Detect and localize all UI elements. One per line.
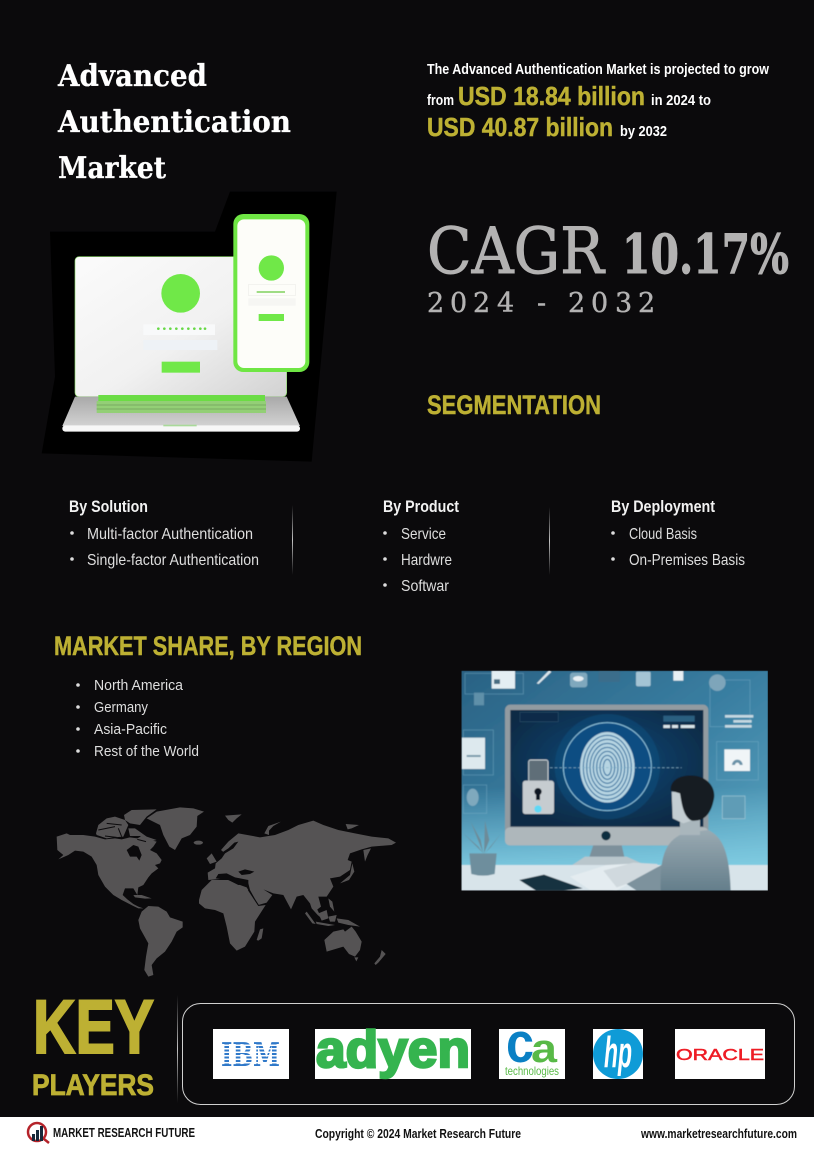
CAGR figure: 2024 - 2032 bbox=[427, 288, 655, 319]
region list: North America bbox=[94, 677, 184, 694]
tablet bbox=[519, 875, 583, 891]
market projection text: in 2024 to bbox=[651, 92, 711, 109]
logo: IBM bbox=[213, 1029, 289, 1079]
segment: by product: Hardwre bbox=[401, 552, 452, 569]
segment: by product: Softwar bbox=[401, 578, 450, 595]
logo: market research future: MARKET RESEARCH FUTURE bbox=[53, 1125, 195, 1140]
logo: Oracle bbox=[675, 1029, 765, 1079]
market share heading: MARKET SHARE, BY REGION bbox=[54, 631, 362, 661]
key players heading: PLAYERS bbox=[32, 1069, 154, 1102]
segment: by product: Service bbox=[401, 526, 446, 543]
segment: by solution bbox=[69, 497, 259, 569]
footer bbox=[0, 1117, 814, 1150]
title bbox=[57, 59, 291, 186]
CAGR figure: CAGR bbox=[427, 215, 606, 289]
market projection text: from bbox=[427, 92, 454, 109]
key players panel bbox=[182, 1004, 794, 1104]
logo: HP bbox=[593, 1028, 643, 1079]
plant bbox=[467, 822, 498, 876]
monitor bbox=[505, 705, 708, 867]
logo: CA Technologies: c bbox=[506, 1011, 534, 1075]
market projection text: USD 40.87 billion bbox=[427, 112, 613, 142]
segment: by deployment bbox=[611, 497, 745, 569]
logo: market research future bbox=[28, 1123, 195, 1143]
illustration: laptop and phone login bbox=[42, 192, 337, 462]
copyright: Copyright © 2024 Market Research Future bbox=[315, 1126, 521, 1141]
person bbox=[603, 776, 731, 891]
segment: by solution: Multi-factor Authentication bbox=[87, 526, 253, 543]
region list: Germany bbox=[94, 699, 148, 716]
title: Market bbox=[58, 151, 166, 186]
market projection text: USD 18.84 billion bbox=[458, 81, 645, 111]
keyboard bbox=[572, 864, 628, 890]
africa, eurasia and oceania bbox=[199, 814, 396, 965]
region list: Asia-Pacific bbox=[94, 721, 167, 738]
CAGR figure bbox=[427, 215, 789, 319]
key players heading: KEY bbox=[33, 985, 154, 1070]
segment: by deployment: On-Premises Basis bbox=[629, 552, 745, 569]
logo: Oracle: ORACLE bbox=[676, 1047, 764, 1064]
logo: CA Technologies: a bbox=[531, 1027, 558, 1071]
logo: Adyen: adyen bbox=[316, 1021, 470, 1079]
segment: by product: By Product bbox=[383, 497, 459, 516]
segmentation heading: SEGMENTATION bbox=[427, 390, 601, 420]
title: Authentication bbox=[57, 105, 291, 140]
segment: by deployment: Cloud Basis bbox=[629, 526, 697, 543]
logo: IBM: IBM bbox=[221, 1035, 280, 1074]
region list bbox=[76, 677, 199, 760]
segment: by product bbox=[383, 497, 459, 595]
region list: Rest of the World bbox=[94, 743, 199, 760]
segment: by solution: Single-factor Authentication bbox=[87, 552, 259, 569]
illustration: fingerprint authentication scene bbox=[461, 670, 768, 891]
world map bbox=[57, 807, 396, 977]
padlock bbox=[523, 760, 554, 814]
market projection text bbox=[427, 61, 769, 142]
segment: by deployment: By Deployment bbox=[611, 497, 715, 516]
segment: by solution: By Solution bbox=[69, 497, 148, 516]
key players heading bbox=[32, 985, 154, 1102]
market projection text: by 2032 bbox=[620, 123, 667, 140]
logo: CA Technologies: technologies bbox=[505, 1064, 559, 1078]
logo: CA Technologies bbox=[499, 1011, 565, 1079]
title: Advanced bbox=[57, 59, 207, 94]
americas and greenland bbox=[57, 807, 204, 977]
logo: HP: hp bbox=[604, 1028, 632, 1077]
